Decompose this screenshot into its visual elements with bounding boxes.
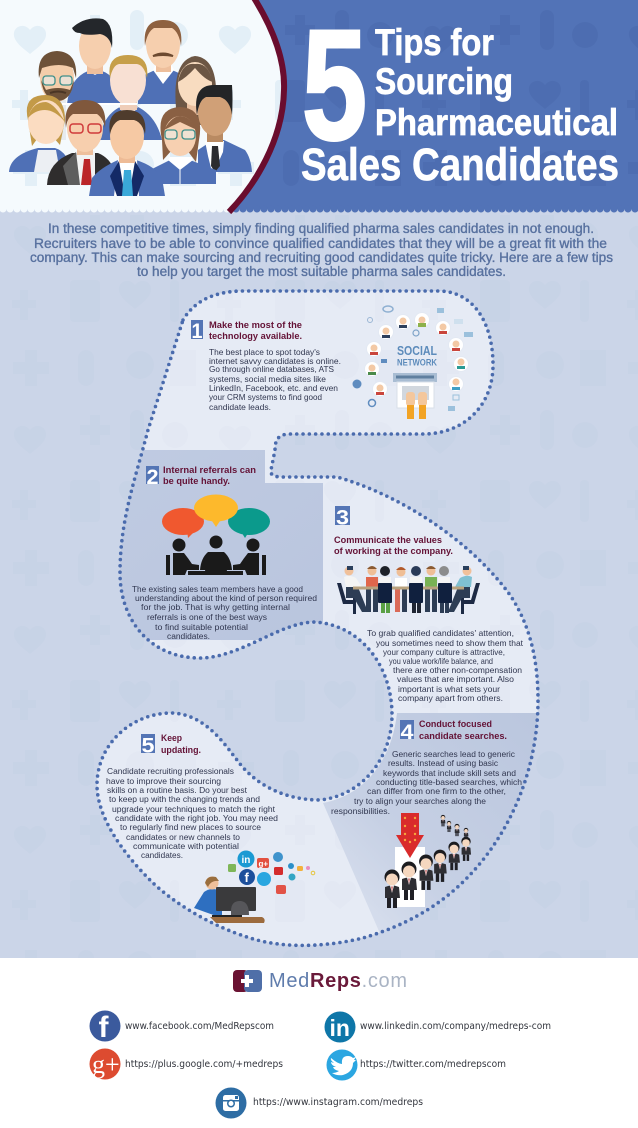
- person seated back navy hair: [410, 566, 422, 613]
- person: moustache man: [138, 20, 190, 104]
- logo wordmark: MedReps.com: [269, 970, 407, 992]
- person: front man blue tie: [89, 110, 165, 196]
- tip 2 heading: Internal referrals can: [163, 464, 256, 475]
- tip 5 body: communicate with potential: [133, 841, 239, 851]
- social link: google plus: g+: [92, 1050, 120, 1079]
- tip 3 body: there are other non-compensation: [393, 665, 522, 675]
- laptop with hands: [393, 373, 437, 419]
- person seated back dark hair: [379, 566, 391, 613]
- intro text: In these competitive times, simply finding qualified pharma sales candidates in not enough.: [48, 221, 594, 236]
- tip 3 body: To grab qualified candidates' attention,: [367, 628, 514, 638]
- social link: instagram: [216, 1088, 423, 1118]
- table top: [353, 586, 464, 590]
- person: blue shirt strip: [62, 103, 137, 105]
- tip 2 body: for the job. That is why getting internal: [141, 602, 290, 612]
- footer: [0, 958, 638, 1128]
- burgundy arc: [229, 0, 284, 212]
- person white shirt red trousers: [395, 567, 407, 612]
- tip 1 body: internet savvy candidates is online.: [209, 356, 341, 366]
- side person right: [448, 566, 472, 612]
- tip 5 body: to keep up with the changing trends and: [109, 794, 260, 804]
- icon: social network illustration: NETWORK: [397, 358, 437, 368]
- tip 1 heading: Make the most of the: [209, 319, 302, 330]
- tip 3 body: your company culture is attractive,: [383, 647, 505, 657]
- social link: twitter: [326, 1050, 506, 1080]
- social link: linkedin: www.linkedin.com/company/medreps-com: [360, 1021, 551, 1032]
- tip 2 heading: [163, 464, 256, 486]
- person in orange shirt: [366, 566, 378, 612]
- social link: facebook: [90, 1010, 274, 1044]
- icon: people around a conference table: [337, 566, 480, 614]
- person at computer: [194, 876, 265, 923]
- tip 1 body: The best place to spot today's: [209, 347, 320, 357]
- group of candidates illustration: [9, 18, 252, 196]
- header right panel: [229, 0, 638, 209]
- tip 4 body: Generic searches lead to generic: [392, 749, 516, 759]
- person: woman with teal glasses: [150, 107, 216, 184]
- red arrow: [396, 813, 424, 858]
- big numeral 5: 5: [302, 0, 367, 173]
- tip 1: [191, 306, 473, 419]
- tip 2 body: The existing sales team members have a good: [132, 584, 303, 594]
- social bubbles: f: [244, 870, 250, 885]
- number badge 3: 3: [336, 506, 349, 530]
- tip 3 body: you value work/life balance, and: [389, 656, 493, 666]
- social bubbles: [228, 850, 315, 894]
- icon: candidate queue with red arrow: [384, 813, 471, 908]
- logo icon: [233, 970, 262, 992]
- tip 4 body: keywords that include skill sets and: [383, 768, 516, 778]
- social link: linkedin: [324, 1012, 551, 1042]
- icon: person at computer with social bubbles: [194, 850, 315, 923]
- number badge 2: 2: [146, 466, 158, 489]
- person: bearded man with glasses: [39, 51, 76, 140]
- person: blond woman: [9, 95, 72, 172]
- social bubbles: g+: [258, 860, 268, 868]
- tip 1 body: your CRM systems to find good: [209, 392, 322, 402]
- tip 2: [132, 464, 317, 641]
- tip 5 body: candidates.: [141, 850, 183, 860]
- numeral five shaped tips area: [97, 291, 545, 945]
- tip 5 body: candidate with the right job. You may need: [115, 813, 278, 823]
- tip 3 body: company apart from others.: [398, 693, 503, 703]
- social link: instagram: https://www.instagram.com/medreps: [253, 1097, 423, 1108]
- person seated back grey hair: [438, 566, 450, 613]
- number badge 4: 4: [400, 721, 414, 744]
- tip 5: [106, 732, 315, 923]
- header band: [0, 0, 638, 212]
- tip 2 body: referrals is one of the best ways: [147, 612, 267, 622]
- number badge 1: 1: [192, 320, 203, 343]
- tip 5 body: candidates or new channels to: [126, 832, 240, 842]
- tip 4 body: conducting title-based searches, which: [376, 777, 522, 787]
- tip 1 body: LinkedIn, Facebook, etc. and even: [209, 383, 338, 393]
- person: blond centre man: [100, 55, 162, 140]
- panel background: tip 2: [100, 450, 323, 640]
- intro text: to help you target the most suitable pharma sales candidates.: [137, 264, 506, 279]
- panel background: tip 4: [323, 713, 545, 945]
- social link: linkedin: in: [330, 1015, 350, 1041]
- social link: google plus: [90, 1048, 283, 1080]
- title line: Sourcing: Sourcing: [375, 61, 513, 102]
- intro text: company. This can make sourcing and recruiting good candidates quite tricky. Here are a few tips: [30, 250, 613, 265]
- social link: facebook: www.facebook.com/MedRepscom: [125, 1021, 274, 1032]
- tip 4 body: try to align your searches along the: [354, 796, 486, 806]
- person: black hair man: [67, 18, 122, 104]
- title line: Tips for: Tips for: [375, 22, 494, 63]
- tip 4: [331, 718, 522, 908]
- tip 1 body: Go through online databases, ATS: [209, 364, 334, 374]
- logo: [233, 970, 407, 992]
- tip 5 body: [106, 766, 278, 860]
- tip 2 body: candidates.: [167, 631, 210, 641]
- tip 3 body: you sometimes need to show them that: [376, 638, 524, 648]
- tip 4 body: results. Instead of using basic: [388, 758, 499, 768]
- person: tan man with black tie: [196, 85, 252, 172]
- icon: team meeting with speech bubbles: [162, 494, 270, 575]
- intro text: Recruiters have to be able to convince qualified candidates that they will be a great fit with the: [34, 236, 607, 251]
- intro text: [30, 221, 613, 279]
- tip 3 body: values that are important. Also: [397, 674, 514, 684]
- tip 5 body: upgrade your techniques to match the right: [112, 804, 276, 814]
- header left panel: [0, 0, 300, 209]
- tip 3 body: important is what sets your: [398, 684, 500, 694]
- tip 5 heading: Keep: [161, 732, 182, 743]
- tip 2 body: [132, 584, 317, 641]
- social link: twitter: https://twitter.com/medrepscom: [360, 1059, 506, 1070]
- tip 5 body: Candidate recruiting professionals: [107, 766, 234, 776]
- person: red glasses man in dark suit: [47, 100, 114, 185]
- tip 5 heading: [161, 732, 201, 755]
- tip 1 body: candidate leads.: [209, 402, 271, 412]
- dotted outline: [97, 291, 538, 945]
- tip 4 body: [331, 749, 522, 816]
- tip 4 body: can differ from one firm to the other,: [367, 786, 506, 796]
- tip 2 heading: be quite handy.: [163, 475, 230, 486]
- tip 2 body: to find suitable potential: [155, 622, 248, 632]
- person: dark long hair woman: [175, 56, 216, 125]
- social bubbles: in: [242, 855, 250, 866]
- tip 3: [334, 506, 524, 703]
- tip 1 heading: technology available.: [209, 330, 302, 341]
- queue of men: [384, 815, 471, 908]
- tip 1 heading: [209, 319, 302, 341]
- social link: facebook: f: [98, 1011, 110, 1044]
- tip 4 heading: candidate searches.: [419, 730, 507, 741]
- tip 4 heading: Conduct focused: [419, 718, 492, 729]
- number badge 5: 5: [142, 734, 155, 758]
- tip 3 heading: of working at the company.: [334, 545, 453, 556]
- icon: social network illustration: [352, 306, 473, 419]
- side person left: [344, 566, 368, 612]
- tip 4 body: responsibilities.: [331, 806, 390, 816]
- tip 5 heading: updating.: [161, 744, 201, 755]
- tip 2 body: understanding about the kind of person required: [135, 593, 317, 603]
- title: [301, 0, 619, 190]
- tip 5 body: have to improve their sourcing: [106, 776, 221, 786]
- label: social network: SOCIAL: [397, 343, 437, 358]
- person green shirt: [425, 566, 437, 612]
- social link: google plus: https://plus.google.com/+medreps: [125, 1059, 283, 1070]
- tip 1 body: [209, 347, 341, 412]
- tip 3 heading: Communicate the values: [334, 534, 442, 545]
- tip 5 body: to regularly find new places to source: [120, 822, 261, 832]
- tip 4 heading: [419, 718, 507, 741]
- tip 3 body: [367, 628, 524, 703]
- tip 1 body: systems, social media sites like: [209, 374, 326, 384]
- tip 3 heading: [334, 534, 453, 556]
- tip 5 body: skills on a routine basis. Do your best: [107, 785, 248, 795]
